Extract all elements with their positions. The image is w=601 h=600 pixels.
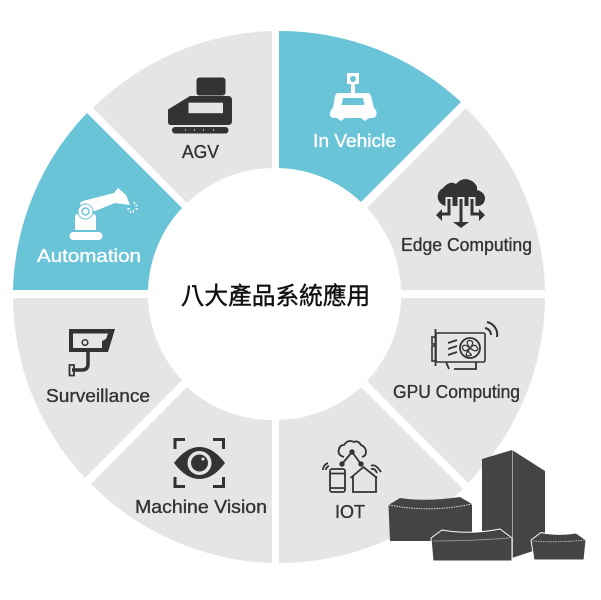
wedge: Automation — [13, 113, 182, 290]
panel: GPU Computing — [367, 298, 545, 483]
panel: Automation — [13, 113, 182, 290]
panel: In Vehicle — [279, 31, 461, 202]
wedge: Edge Computing — [367, 108, 545, 290]
label: GPU Computing: GPU Computing — [393, 382, 520, 402]
panel: AGV — [93, 31, 272, 203]
wedge: IOT — [279, 387, 463, 563]
icon: eye in viewfinder — [174, 440, 225, 486]
icon: robot arm — [70, 188, 138, 240]
wedge: In Vehicle — [279, 31, 461, 202]
icon: edge cloud — [436, 179, 485, 228]
product: tower chassis — [482, 450, 545, 558]
wedge: Surveillance — [13, 298, 182, 478]
icon: IoT cloud, phone and house — [323, 441, 381, 492]
icon: graphics card — [432, 322, 497, 369]
panel: Edge Computing — [367, 108, 545, 290]
panel: Machine Vision — [91, 387, 272, 563]
label: Surveillance: Surveillance — [46, 386, 150, 406]
product group: embedded systems — [388, 450, 586, 561]
icon: automated guided vehicle — [168, 78, 232, 134]
product: right box — [531, 532, 586, 560]
wedge: AGV — [93, 31, 272, 203]
label: In Vehicle: In Vehicle — [313, 131, 396, 151]
panel: Surveillance — [13, 298, 182, 478]
panel: IOT — [279, 387, 463, 563]
label: Edge Computing: Edge Computing — [401, 235, 532, 255]
title: 八大產品系統應用 — [181, 283, 370, 310]
label: Automation: Automation — [37, 246, 141, 266]
label: IOT: IOT — [335, 502, 365, 522]
wedge: Machine Vision — [91, 387, 272, 563]
label: AGV: AGV — [182, 142, 219, 162]
wedge: GPU Computing — [367, 298, 545, 483]
product: left box — [388, 497, 472, 541]
product: center box — [431, 529, 512, 561]
icon: vehicle — [330, 73, 377, 121]
label: Machine Vision: Machine Vision — [135, 497, 267, 517]
icon: security camera — [69, 329, 115, 376]
